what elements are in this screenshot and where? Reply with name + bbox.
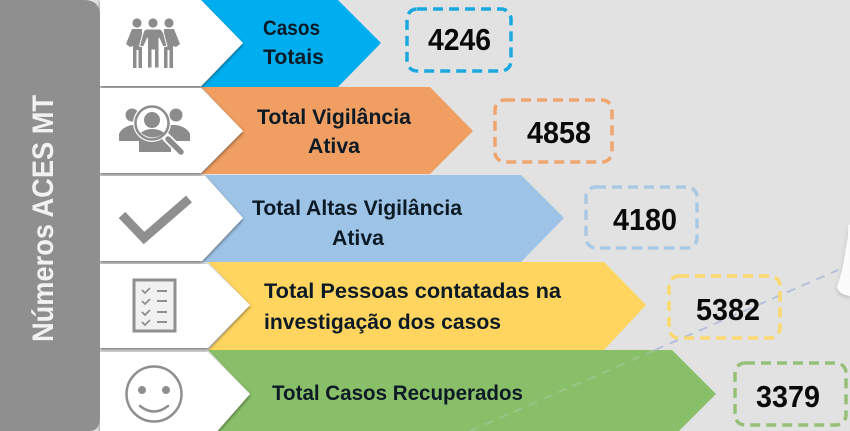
arrow: Total Altas Vigilância Ativa [202, 175, 564, 262]
dashed map line [470, 270, 838, 431]
arrow: Total Casos Recuperados [208, 350, 716, 431]
value box: 3379 [735, 363, 846, 425]
label: Total Pessoas contatadas na investigação dos casos: investigação dos casos [264, 311, 501, 334]
side panel title: Números ACES MT [27, 95, 60, 342]
label: Total Pessoas contatadas na investigação dos casos [264, 280, 561, 334]
white chevrons [100, 0, 250, 431]
arrow: Total Vigilância Ativa [201, 87, 473, 174]
label: Casos Totais: Casos [263, 17, 320, 40]
icon: people [126, 18, 180, 68]
icon: check mark [122, 199, 189, 238]
icon: search people [119, 104, 190, 153]
arrow: Casos Totais [201, 0, 381, 87]
label: Total Vigilância Ativa: Ativa [308, 135, 360, 158]
value box: 4858: 4858 [527, 115, 591, 150]
value box: 5382 [669, 276, 780, 338]
decorative map shape at right edge [837, 224, 850, 296]
label: Casos Totais: Totais [263, 46, 324, 69]
label: Total Altas Vigilância Ativa [252, 197, 462, 250]
icon: checklist [134, 280, 175, 331]
value box: 4858 [495, 100, 612, 162]
value box: 5382: 5382 [696, 292, 760, 327]
side panel [0, 0, 100, 431]
value box: 4180 [586, 187, 697, 248]
icon: smiley [126, 366, 182, 422]
value box: 4180: 4180 [613, 202, 677, 237]
label: Total Vigilância Ativa [257, 106, 411, 158]
label: Total Altas Vigilância Ativa: Total Altas Vigilância [252, 197, 462, 220]
label: Casos Totais [263, 17, 324, 69]
label: Total Vigilância Ativa: Total Vigilância [257, 106, 411, 129]
label: Total Casos Recuperados: Total Casos Recuperados [272, 382, 523, 405]
arrow: Total Pessoas contatadas [208, 262, 646, 350]
value box: 3379: 3379 [756, 379, 820, 414]
label: Total Altas Vigilância Ativa: Ativa [332, 227, 384, 250]
value box: 4246 [407, 9, 511, 71]
value box: 4246: 4246 [428, 22, 491, 57]
label: Total Pessoas contatadas na investigação dos casos: Total Pessoas contatadas na [264, 280, 561, 303]
